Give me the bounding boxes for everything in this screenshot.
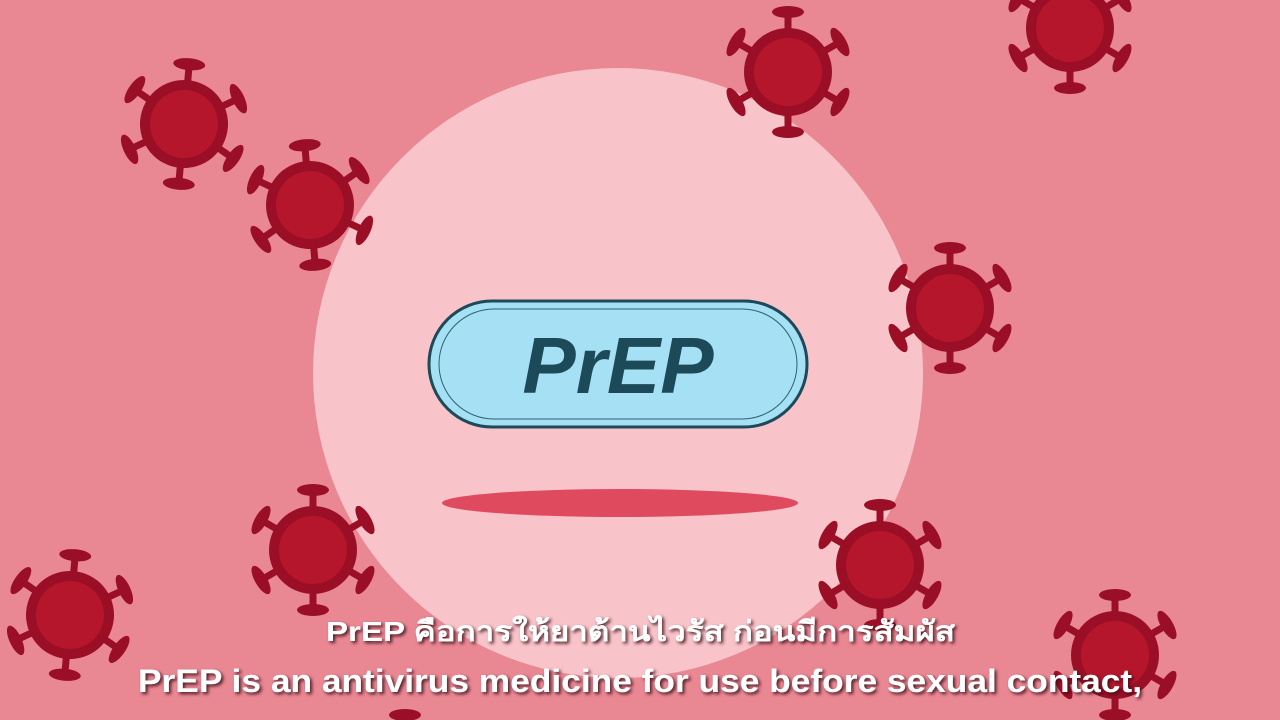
subtitle line English: PrEP is an antivirus medicine for use before sexual contact, [138,663,1142,699]
virus icon 8 [815,499,945,631]
pill shadow [442,489,798,517]
pill: PrEP [429,301,807,427]
subtitle [138,615,1142,699]
virus icon 7 [0,544,141,686]
virus icon 9 [1050,589,1180,720]
virus icon 5 [885,242,1015,374]
background circle [313,68,923,678]
virus icon 6 [248,484,378,616]
virus icon 4 [1005,0,1135,94]
subtitle line Thai: PrEP คือการให้ยาต้านไวรัส ก่อนมีการสัมผัส [326,615,956,647]
virus icon 2 [239,134,381,276]
virus icon 1 [113,53,255,195]
virus icon 3 [723,6,853,138]
virus icon 10 [340,709,470,720]
pill label: PrEP [522,321,714,410]
